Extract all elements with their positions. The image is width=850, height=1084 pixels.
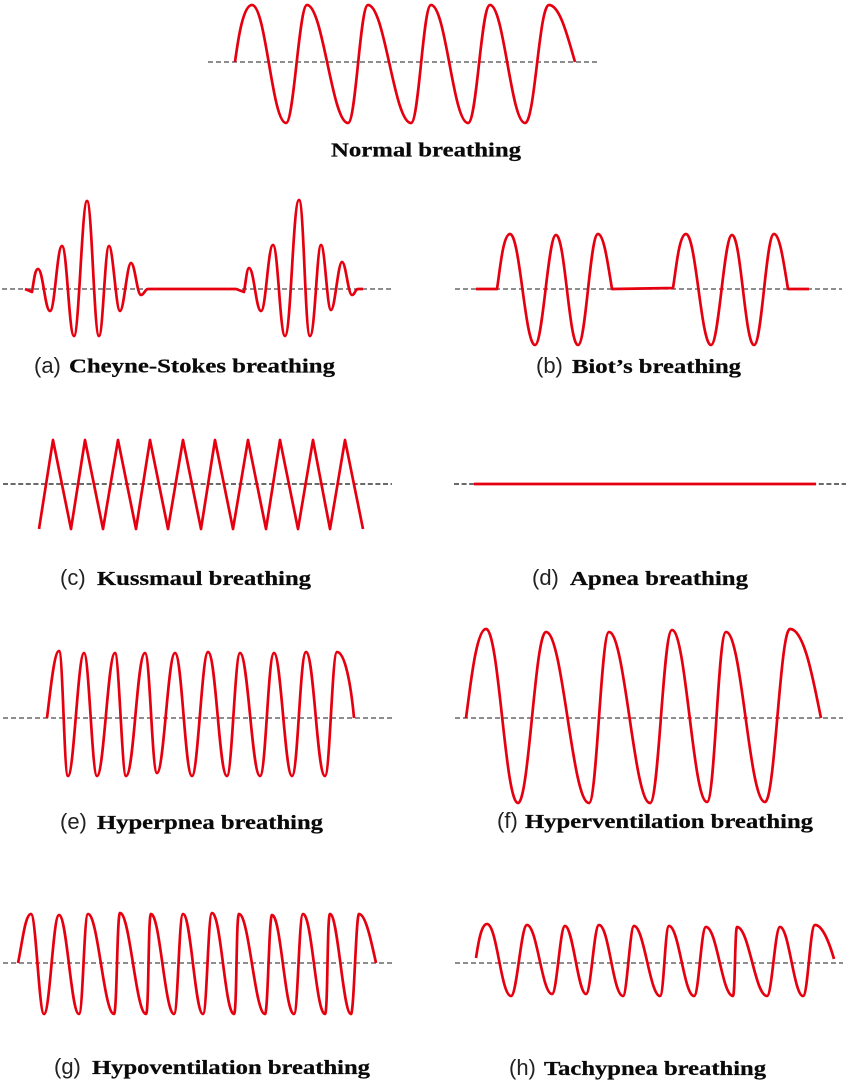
label: (g) Hypoventilation breathing: Hypoventilation breathing (92, 1058, 370, 1079)
label: (g) Hypoventilation breathing: (g) (54, 1054, 81, 1079)
waveform: Biot's breathing (476, 234, 809, 345)
panel: normal breathing (208, 5, 597, 162)
label: (a) Cheyne-Stokes breathing: Cheyne-Stokes breathing (69, 356, 335, 378)
label: (d) Apnea breathing: (d) (532, 565, 559, 590)
panel: (h) Tachypnea breathing (455, 924, 843, 1080)
label: (h) Tachypnea breathing: (h) (509, 1055, 536, 1080)
waveform: Hypoventilation breathing (18, 913, 376, 1014)
label: (e) Hyperpnea breathing: Hyperpnea breathing (97, 813, 323, 834)
waveform: Cheyne-Stokes breathing (25, 200, 363, 336)
waveform: Apnea flat line (474, 483, 816, 485)
waveform: normal breathing (235, 5, 575, 123)
label: (f) Hyperventilation breathing: (f) (497, 808, 518, 833)
panel: (g) Hypoventilation breathing (3, 913, 392, 1079)
label: (b) Biot's breathing: (b) (536, 353, 563, 378)
panel: (f) Hyperventilation breathing (455, 629, 843, 833)
panel: (b) Biot's breathing (455, 234, 842, 378)
label: (a) Cheyne-Stokes breathing: (a) (34, 353, 61, 378)
label: (e) Hyperpnea breathing: (e) (60, 809, 87, 834)
label: (d) Apnea breathing: Apnea breathing (570, 569, 748, 590)
label: (h) Tachypnea breathing: Tachypnea breathing (544, 1059, 766, 1080)
panel: (a) Cheyne-Stokes breathing (2, 200, 392, 378)
label: (c) Kussmaul breathing: (c) (60, 565, 86, 590)
label: (b) Biot's breathing: Biot’s breathing (572, 357, 741, 378)
label: normal breathing: Normal breathing (331, 140, 521, 162)
waveform: Kussmaul breathing (39, 440, 363, 529)
waveform: Hyperventilation breathing (466, 629, 821, 803)
label: (c) Kussmaul breathing: Kussmaul breathing (97, 569, 311, 590)
panel: (e) Hyperpnea breathing (3, 651, 392, 834)
waveform: Tachypnea breathing (476, 924, 834, 996)
label: (f) Hyperventilation breathing: Hyperventilation breathing (525, 812, 813, 833)
panel: (d) Apnea breathing (454, 484, 846, 590)
waveform: Hyperpnea breathing (47, 651, 354, 776)
panel: (c) Kussmaul breathing (3, 440, 392, 590)
